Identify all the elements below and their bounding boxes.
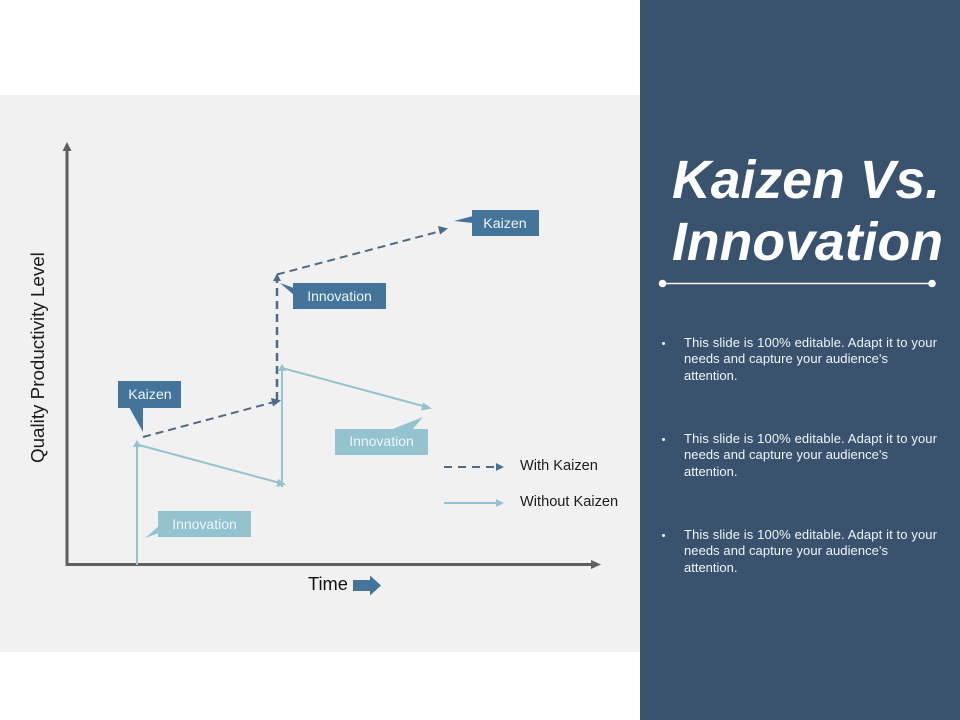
legend: with Kaizen: With Kaizen [520, 458, 598, 474]
text block: bullet 2: This slide is 100% editable. Adapt it to your [684, 431, 938, 446]
callout: Innovation lower: Innovation [172, 516, 237, 532]
text block: bullet 3 [662, 527, 938, 575]
text block: bullet 1 [662, 335, 938, 383]
vertical axis arrow [62, 142, 72, 566]
line: without Kaizen path [133, 364, 432, 565]
y axis label: Quality Productivity Level [27, 252, 48, 463]
title: Innovation [672, 212, 943, 272]
callout: Kaizen upper: Kaizen [483, 216, 527, 232]
line: with Kaizen path [143, 226, 448, 437]
callout: Innovation upper [280, 283, 386, 309]
text block: bullet 3: This slide is 100% editable. Adapt it to your [684, 527, 938, 542]
callout: Innovation middle: Innovation [349, 433, 414, 449]
text block: bullet 1: attention. [684, 368, 738, 383]
legend: without Kaizen [444, 494, 618, 510]
divider with end dots [659, 280, 936, 287]
callout: Kaizen upper [454, 210, 539, 236]
icon: time arrow [353, 576, 381, 596]
panel: chart background [0, 95, 640, 652]
callout: Kaizen lower [118, 381, 181, 432]
text block: bullet 3: attention. [684, 560, 738, 575]
text block: bullet 1: needs and capture your audience's [684, 351, 888, 366]
callout: Innovation upper: Innovation [307, 288, 372, 304]
callout: Innovation lower [145, 511, 251, 538]
text block: bullet 2 [662, 431, 938, 479]
legend: without Kaizen: Without Kaizen [520, 494, 618, 510]
callout: Kaizen lower: Kaizen [128, 387, 172, 403]
legend: with Kaizen [444, 458, 598, 474]
callout: Innovation middle [335, 417, 428, 455]
text block: bullet 2: needs and capture your audience's [684, 447, 888, 462]
text block: bullet 3: needs and capture your audience's [684, 543, 888, 558]
text block: bullet 2: attention. [684, 464, 738, 479]
title: Kaizen Vs. [672, 150, 940, 210]
text block: bullet 1: This slide is 100% editable. Adapt it to your [684, 335, 938, 350]
horizontal axis arrow [66, 560, 601, 569]
x axis label: Time [308, 573, 348, 594]
panel: title sidebar [640, 0, 960, 720]
